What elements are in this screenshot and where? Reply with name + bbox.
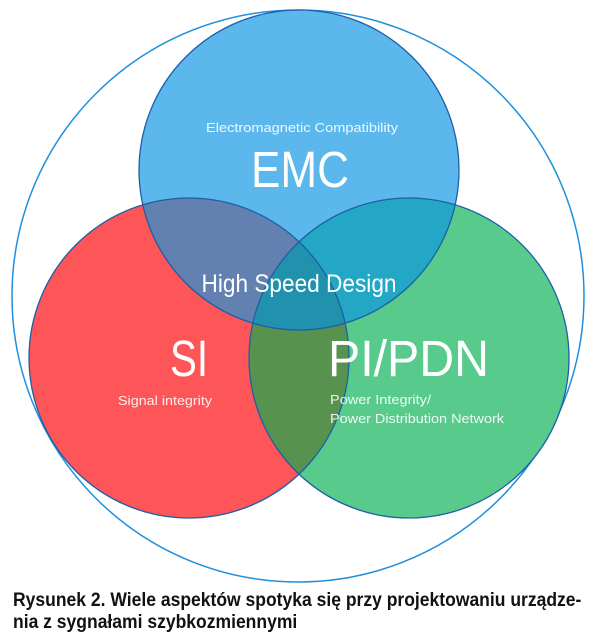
label: Signal integrity: Signal integrity bbox=[118, 393, 213, 408]
overlap: EMC and SI bbox=[144, 198, 298, 322]
label: PI/PDN: PI/PDN bbox=[328, 330, 489, 387]
label: Power Integrity / Power Distribution Network: Power Distribution Network bbox=[330, 411, 505, 426]
label: SI: SI bbox=[170, 330, 208, 387]
circle: EMC bbox=[139, 10, 459, 330]
circle outlines bbox=[29, 10, 569, 518]
label: Power Integrity / Power Distribution Network bbox=[330, 392, 505, 426]
label: Electromagnetic Compatibility: Electromagnetic Compatibility bbox=[206, 120, 399, 135]
circle: SI bbox=[29, 198, 349, 518]
overlap: centre bbox=[254, 243, 344, 330]
overlap: SI and PI bbox=[250, 324, 348, 473]
overlap: EMC and PI bbox=[300, 198, 454, 322]
caption bbox=[13, 590, 581, 632]
label: EMC: EMC bbox=[251, 141, 349, 198]
label: Power Integrity / Power Distribution Network: Power Integrity/ bbox=[330, 392, 431, 407]
caption: nia z sygnałami szybkozmiennymi bbox=[13, 612, 297, 632]
caption: Rysunek 2. Wiele aspektów spotyka się przy projektowaniu urządze- bbox=[13, 590, 581, 611]
circle: PI/PDN bbox=[249, 198, 569, 518]
label: High Speed Design: High Speed Design bbox=[202, 270, 396, 298]
